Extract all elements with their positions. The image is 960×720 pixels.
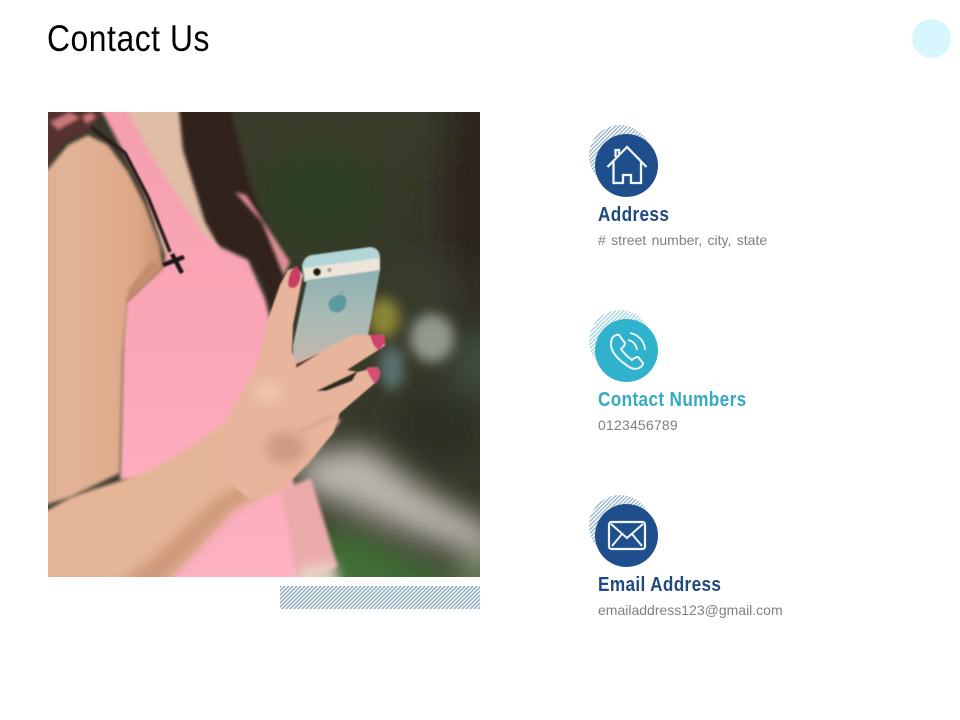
heading: contact numbers: Contact Numbers	[598, 389, 747, 411]
apple logo	[329, 291, 346, 312]
contact item: email address	[589, 495, 783, 618]
hatched strip below photo	[280, 586, 480, 609]
text: address detail: # street number, city, state	[598, 232, 767, 248]
hair at top left	[30, 100, 115, 180]
phone	[292, 247, 380, 366]
title: Contact Us	[47, 18, 210, 59]
text: phone number: 0123456789	[598, 417, 678, 433]
photo background	[48, 80, 505, 610]
forearm	[30, 383, 341, 590]
armpit shadow	[127, 262, 162, 302]
icon: phone	[589, 310, 658, 382]
dress	[96, 100, 300, 590]
lower pink fabric	[281, 478, 338, 585]
text: email: emailaddress123@gmail.com	[598, 602, 783, 618]
pink strap right of hair	[235, 192, 290, 276]
fingernails	[288, 266, 300, 288]
icon: envelope	[589, 495, 658, 567]
shadow between fingers	[316, 371, 358, 391]
contact item: contact numbers	[589, 310, 747, 433]
hair strands on right of neck	[178, 100, 283, 310]
hand and fingers	[215, 266, 385, 500]
decorative light blue circle	[912, 19, 951, 58]
heading: email address: Email Address	[598, 574, 721, 596]
black strap and knot	[91, 127, 184, 273]
icon: house	[589, 125, 658, 197]
upper arm	[30, 135, 163, 510]
chest skin	[115, 100, 220, 270]
heading: address: Address	[598, 204, 669, 226]
photo: woman holding a phone	[48, 112, 480, 577]
contact item: address	[589, 125, 767, 248]
